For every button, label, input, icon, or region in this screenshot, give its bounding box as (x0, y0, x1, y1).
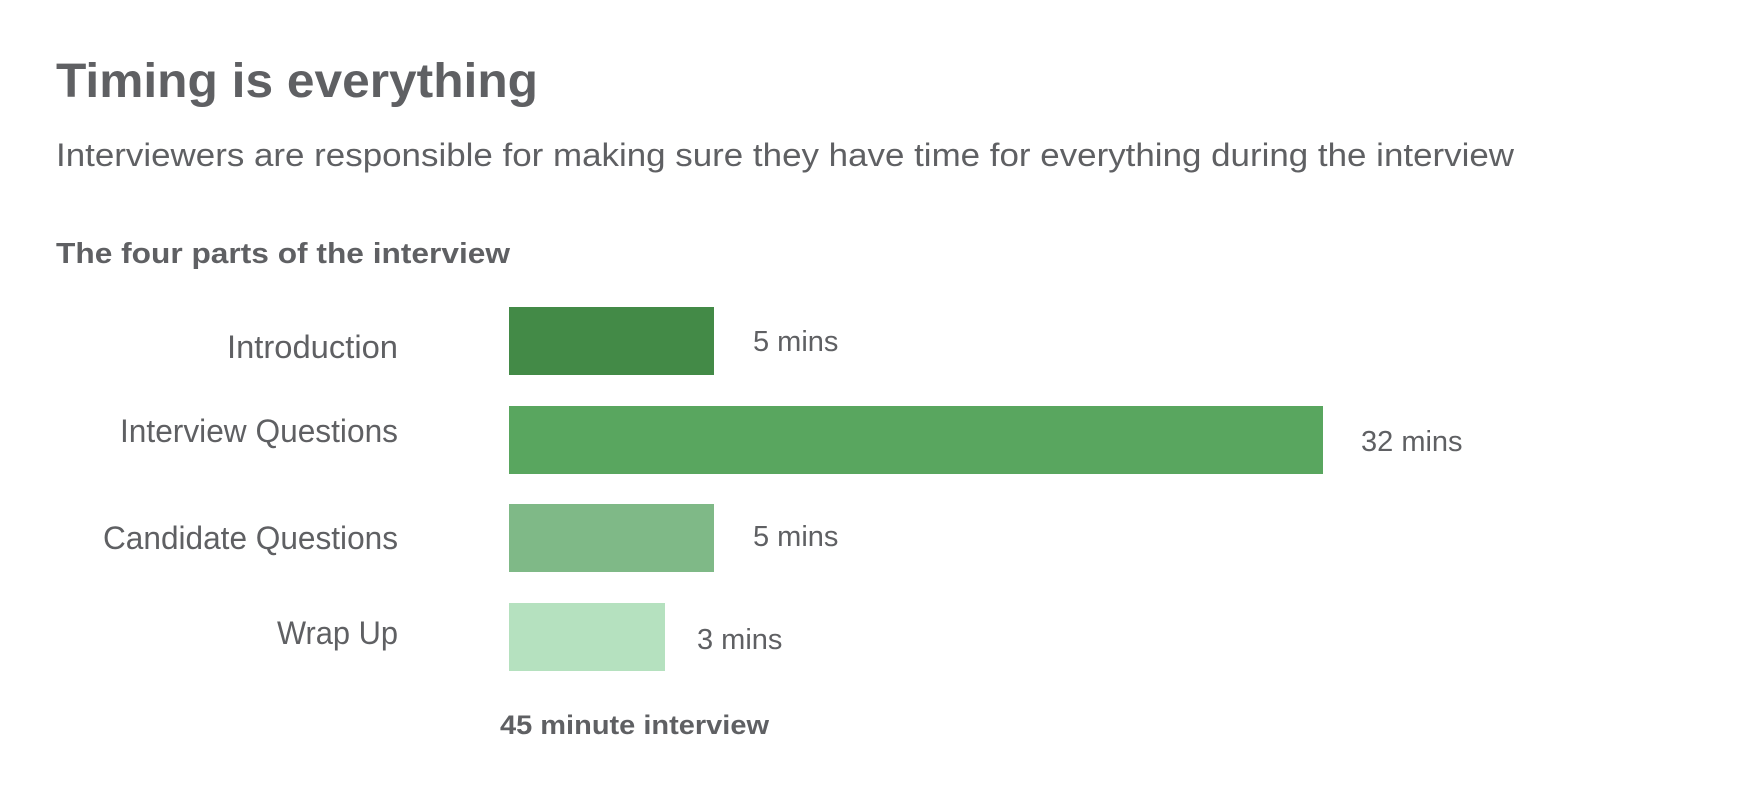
bar: Candidate Questions: 5 mins (753, 521, 838, 553)
bar: Interview Questions (120, 406, 1463, 474)
bar: Introduction: 5 mins (753, 326, 838, 358)
bar: Candidate Questions: Candidate Questions (103, 520, 398, 556)
bar: Wrap Up: Wrap Up (277, 615, 398, 651)
bar: Wrap Up (277, 603, 782, 671)
bar: Introduction (227, 307, 838, 375)
bar chart (103, 307, 1463, 671)
section heading: The four parts of the interview (56, 238, 510, 270)
bar: Introduction: Introduction (227, 329, 398, 365)
bar: Interview Questions: Interview Questions (120, 413, 398, 449)
bar: Wrap Up: 3 mins (697, 624, 782, 656)
bar: Candidate Questions (103, 504, 838, 572)
subtitle: Interviewers are responsible for making sure they have time for everything during the interview (56, 137, 1515, 173)
axis caption: 45 minute interview (500, 710, 770, 740)
bar: Interview Questions: 32 mins (1361, 426, 1463, 458)
title: Timing is everything (56, 55, 538, 108)
